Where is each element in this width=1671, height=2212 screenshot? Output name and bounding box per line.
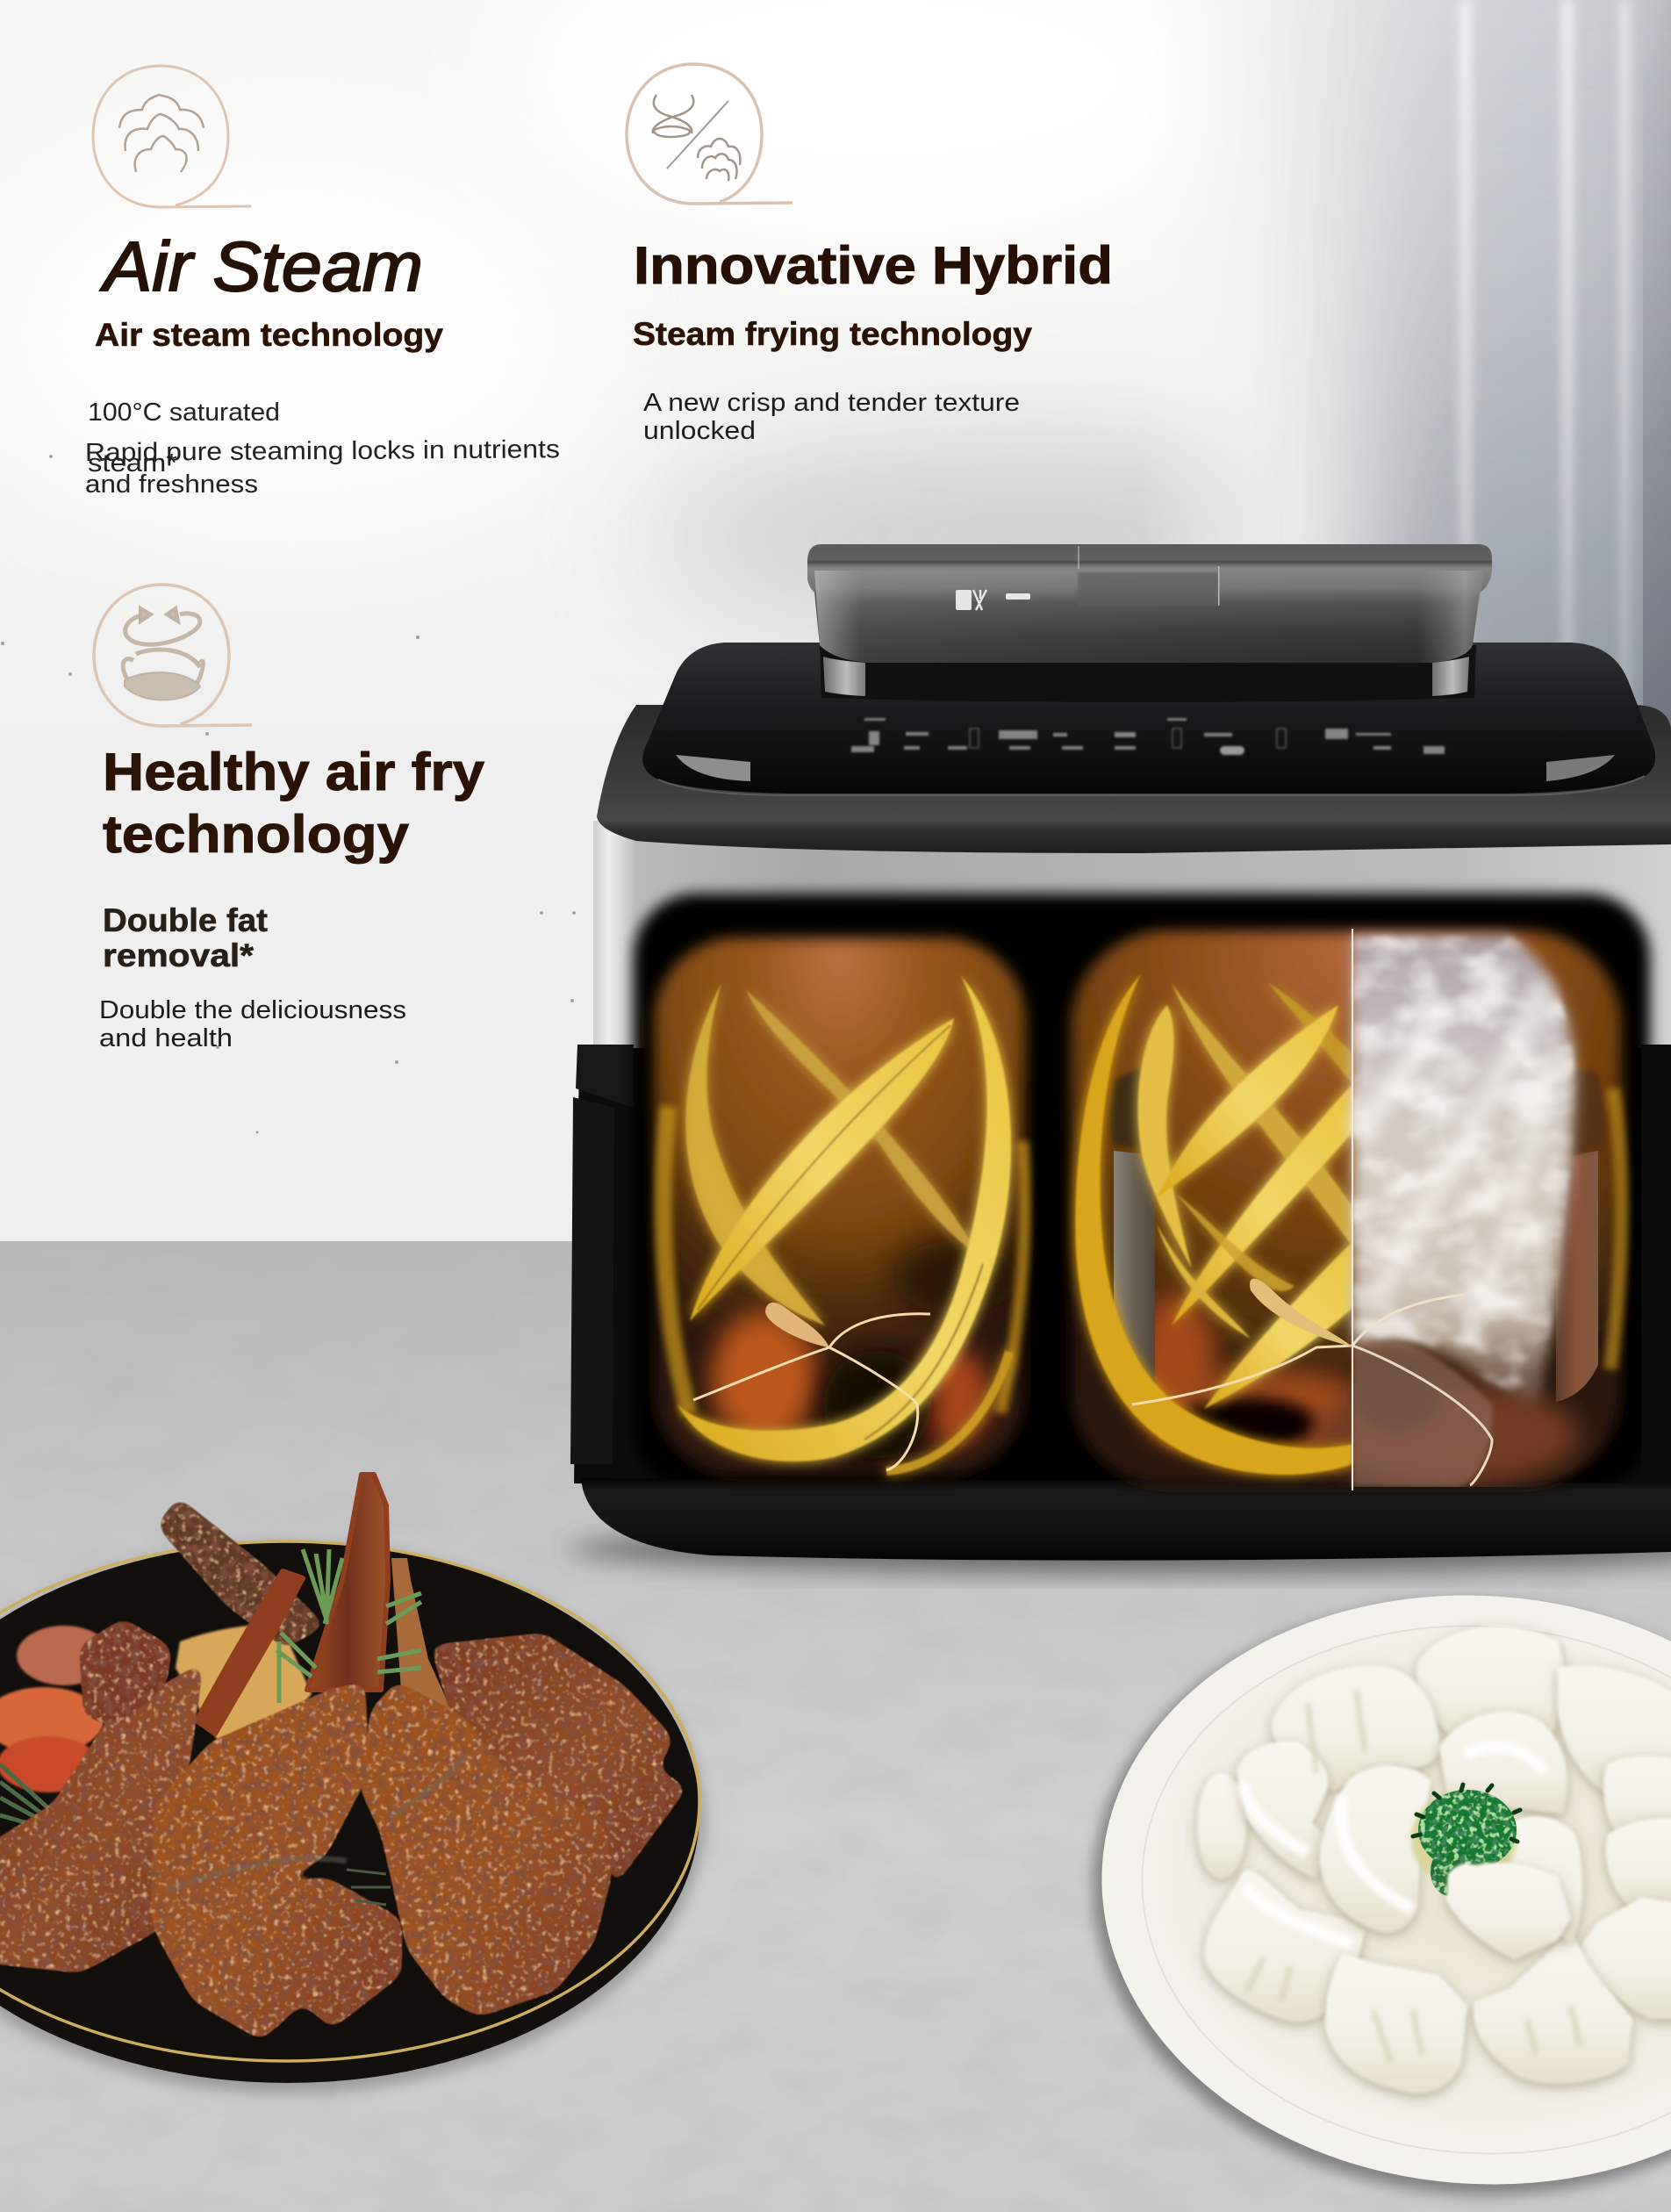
heading: Air Steam	[100, 227, 423, 305]
icon: cloud layers	[93, 66, 251, 207]
feature: healthy air fry	[94, 585, 485, 1052]
description: 100°C saturated	[88, 399, 280, 427]
subheading: Air steam technology	[95, 317, 443, 353]
food: lamb chops plate	[0, 1475, 704, 2093]
heading: technology	[103, 805, 410, 864]
description: and freshness	[85, 470, 258, 499]
subheading: removal*	[103, 937, 255, 973]
subheading	[103, 902, 268, 973]
description: and health	[99, 1024, 233, 1052]
heading	[103, 743, 485, 864]
base	[581, 1478, 1671, 1561]
lower black body	[570, 1045, 1671, 1492]
front dumpling	[1446, 1863, 1571, 1959]
subheading: Steam frying technology	[633, 316, 1032, 352]
chamber: air fry	[654, 937, 1026, 1476]
icon: swirling arrows	[94, 585, 252, 726]
chop back right	[430, 1633, 688, 1887]
control lid	[642, 643, 1655, 795]
steel body	[593, 821, 1671, 1053]
air fryer	[570, 544, 1671, 1574]
air vent swirl left	[693, 1303, 930, 1470]
bones	[156, 1475, 458, 1734]
airflow ribbons right	[1076, 974, 1352, 1475]
rosemary left	[0, 1764, 48, 1824]
feature: air steam	[85, 66, 560, 499]
food: dumpling plate	[1072, 1570, 1671, 2212]
chop centre	[151, 1681, 402, 2041]
airflow ribbons left	[678, 976, 1011, 1471]
water tank	[807, 544, 1492, 702]
description: A new crisp and tender texture	[643, 389, 1020, 417]
description: Rapid pure steaming locks in nutrients	[85, 435, 560, 467]
description	[643, 389, 1020, 445]
chamber rim glow left	[663, 1106, 1025, 1413]
description: unlocked	[643, 417, 756, 445]
description	[99, 996, 406, 1052]
collar	[597, 705, 1671, 853]
control panel marks	[851, 718, 1445, 755]
basket bars	[1111, 1062, 1606, 1402]
description: steam*	[88, 449, 177, 478]
potatoes	[176, 1624, 312, 1751]
table surface	[0, 1241, 1671, 2212]
rosemary sprigs	[276, 1549, 421, 1703]
plate	[0, 1542, 699, 2083]
heading: Healthy air fry	[103, 743, 485, 801]
icon: airflow and steam split	[627, 64, 792, 204]
broccoli	[1411, 1785, 1520, 1896]
air vent swirl right	[1132, 1279, 1352, 1404]
description: Double the deliciousness	[99, 996, 406, 1024]
description	[85, 399, 560, 499]
black viewing window	[634, 894, 1650, 1490]
dumplings	[1197, 1627, 1671, 2094]
chamber: hybrid steam	[1071, 929, 1622, 1490]
heading: Innovative Hybrid	[634, 236, 1113, 295]
subheading: Double fat	[103, 902, 268, 938]
chop front right	[360, 1681, 613, 2017]
plate	[1082, 1570, 1671, 2209]
dumpling highlights and folds	[1242, 1690, 1580, 2063]
chop left	[0, 1661, 204, 1973]
feature: innovative hybrid	[627, 64, 1113, 445]
steam half	[1352, 929, 1621, 1490]
tomatoes	[0, 1626, 111, 1792]
wall background	[0, 0, 1671, 1246]
icon: tank label	[956, 590, 1030, 610]
